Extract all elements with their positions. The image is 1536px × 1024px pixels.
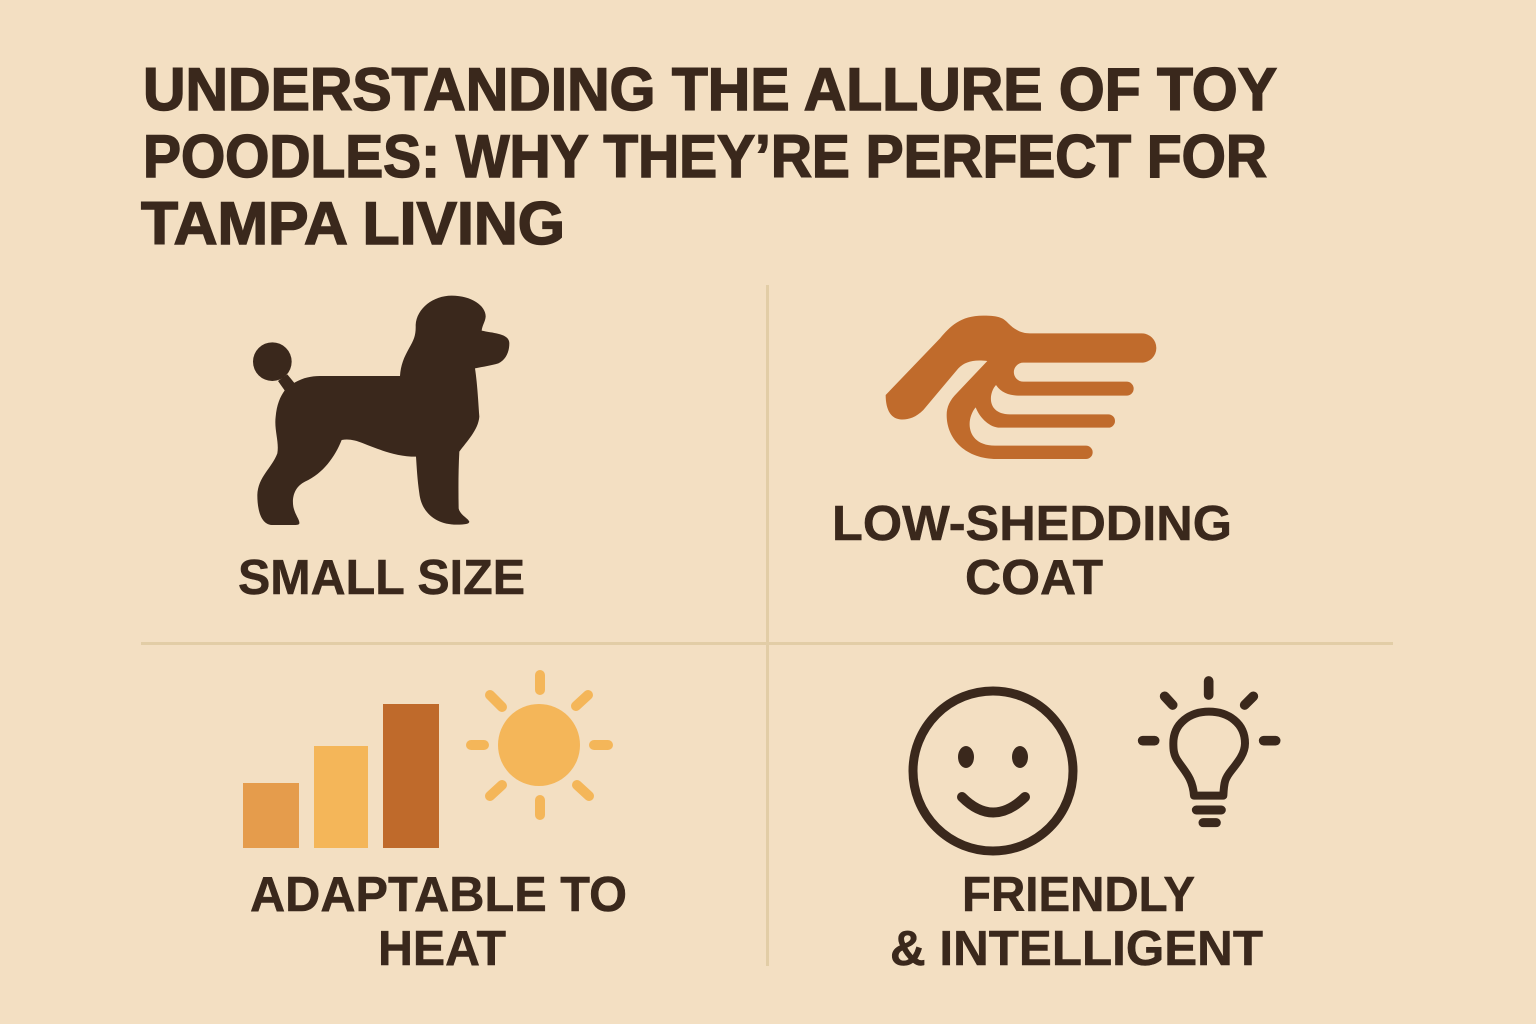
label: adaptable to heat <box>250 868 627 976</box>
title: TAMPA LIVING <box>141 190 565 257</box>
panel: low-shedding coat <box>832 316 1232 605</box>
label: adaptable to heat: HEAT <box>378 922 506 976</box>
panel: friendly and intelligent <box>890 681 1276 976</box>
title: UNDERSTANDING THE ALLURE OF TOY <box>143 56 1277 123</box>
panel: adaptable to heat <box>243 675 627 976</box>
label: friendly and intelligent: & INTELLIGENT <box>890 922 1263 976</box>
panel: small size <box>238 296 525 605</box>
icon: smiley face <box>913 691 1073 851</box>
label: low-shedding coat <box>832 497 1232 605</box>
label: adaptable to heat: ADAPTABLE TO <box>250 868 627 922</box>
icon: poodle silhouette <box>253 296 509 525</box>
label: low-shedding coat: COAT <box>965 551 1103 605</box>
icon: coat hand <box>886 316 1156 459</box>
icon: bar chart <box>243 704 439 848</box>
icon: light bulb <box>1143 681 1276 823</box>
title: POODLES: WHY THEY’RE PERFECT FOR <box>143 123 1267 190</box>
icon: sun <box>471 675 608 815</box>
label: low-shedding coat: LOW-SHEDDING <box>832 497 1232 551</box>
label: friendly and intelligent <box>890 868 1263 976</box>
label: small size: SMALL SIZE <box>238 551 525 605</box>
title <box>141 56 1277 257</box>
label: friendly and intelligent: FRIENDLY <box>962 868 1195 922</box>
